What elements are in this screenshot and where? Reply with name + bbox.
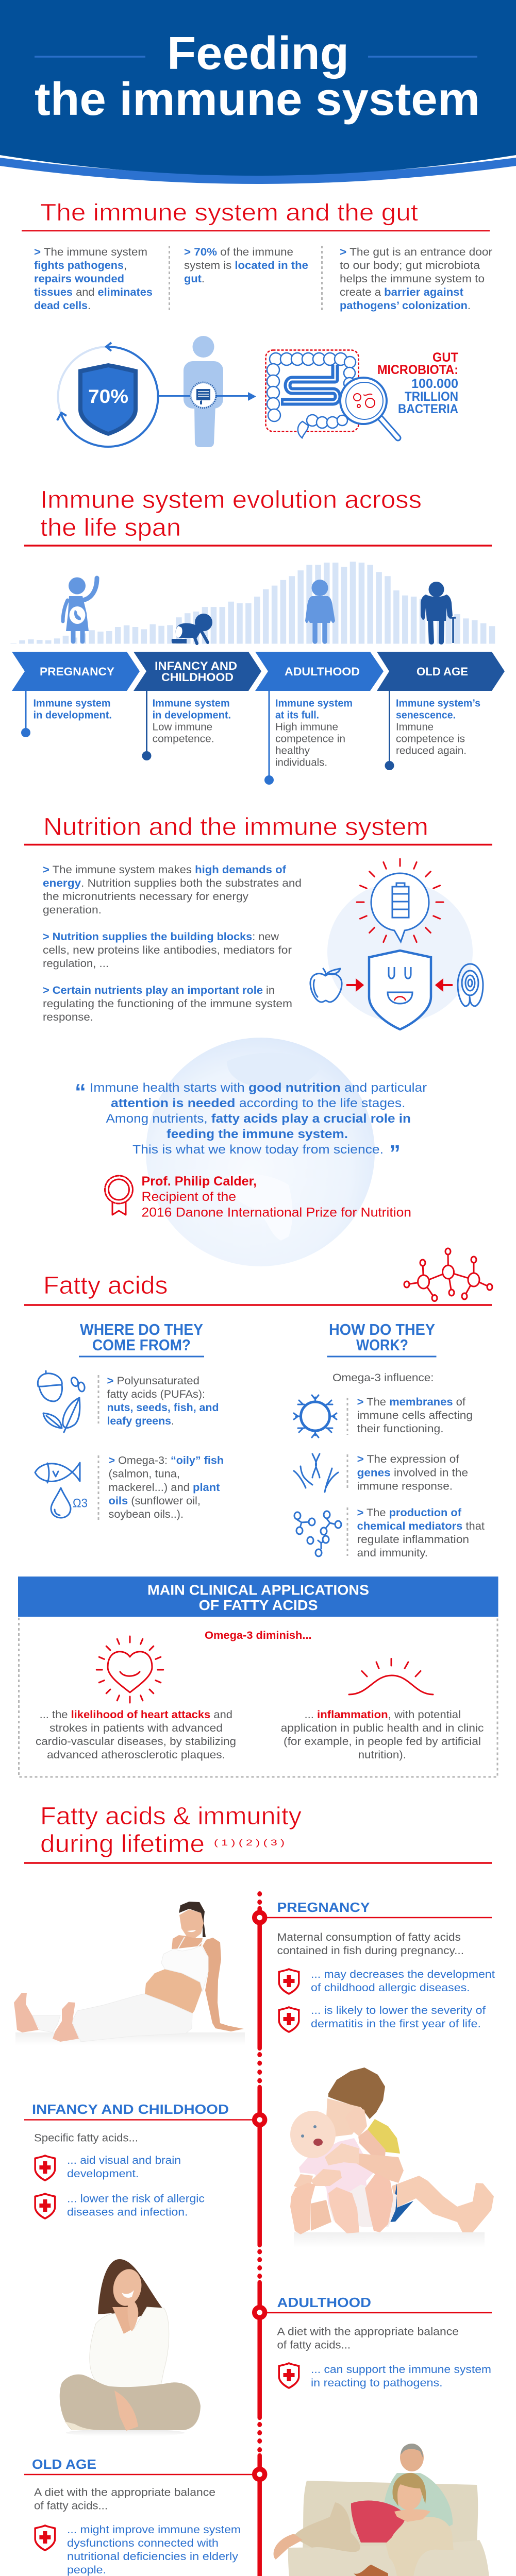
stage note: old age: reduced again.: [396, 745, 467, 756]
column 2: > 70% of the immune: [184, 246, 293, 258]
benefit: allergy risk: diseases and infection.: [67, 2206, 188, 2218]
text: heart benefit: advanced atherosclerotic plaques.: [47, 1749, 225, 1761]
text: PUFAs: fatty acids (PUFAs):: [107, 1388, 205, 1400]
section heading: fatty acids: Fatty acids: [43, 1272, 168, 1299]
text block: nutrition points: > Nutrition supplies the building blocks : new: [43, 931, 279, 943]
benefit: brain development: development.: [67, 2168, 139, 2180]
quote: This is what we know today from science.: [132, 1143, 384, 1157]
chevron: old age: [377, 652, 505, 691]
text: omega-3 sources: [108, 1455, 224, 1520]
text: chemical mediators: > The production of: [357, 1507, 462, 1519]
stage note: old age: Immune: [396, 721, 434, 733]
upper arm: [358, 2129, 386, 2156]
panel: infancy and childhood: [24, 2067, 494, 2248]
speech bubble with battery: [357, 859, 443, 942]
icon: gut with magnifier: [266, 350, 398, 438]
stage note: old age: Immune system’s: [396, 698, 480, 709]
section heading: nutrition and the immune system: Nutrition and the immune system: [43, 814, 428, 841]
text block: nutrition points: > Certain nutrients play an important role in: [43, 985, 275, 996]
text: inflammation benefit: [281, 1709, 484, 1761]
stage note: pregnancy: [21, 691, 112, 737]
text block: nutrition points: regulation, ...: [43, 958, 109, 970]
smiling shield: [369, 951, 431, 1029]
stage note: infancy: Immune system: [153, 698, 230, 709]
subsection heading: PREGNANCY: [277, 1900, 370, 1915]
older child's face and hair: [326, 2098, 364, 2137]
chevron: pregnancy: PREGNANCY: [40, 665, 114, 678]
icon: award rosette: [105, 1176, 133, 1215]
panel: where do they come from: [35, 1320, 224, 1520]
column 3: [340, 246, 492, 312]
photo: pregnant woman: [14, 1902, 245, 2045]
icon: cell membrane: [294, 1395, 337, 1437]
benefit: reacting to pathogens: in reacting to pathogens.: [311, 2377, 443, 2389]
intro: contained in fish during pregnancy...: [277, 1945, 464, 1957]
text block: nutrition points: [43, 864, 302, 1023]
column 3: pathogens’ colonization .: [340, 300, 471, 312]
stage note: adulthood: competence in: [275, 734, 345, 745]
text: inflammation benefit: ... inflammation , with potential: [304, 1709, 461, 1721]
text block: nutrition points: energy. Nutrition supplies both the substrates and: [43, 877, 302, 889]
text: gene expression: genes involved in the: [357, 1467, 468, 1479]
icon: crawling baby: [172, 614, 212, 643]
intro: Maternal consumption of fatty acids: [277, 1931, 461, 1943]
benefit: brain development: ... aid visual and brain: [67, 2155, 181, 2166]
stage note: adulthood: Immune system: [275, 698, 353, 709]
title: Feeding: [167, 28, 349, 79]
benefit: dermatitis: dermatitis in the first year of life.: [311, 2018, 481, 2030]
stage note: adulthood: at its full.: [275, 710, 319, 721]
icon: 70 percent shield in circular arrow: 70%: [88, 386, 128, 407]
column 3: create a barrier against: [340, 286, 463, 298]
stage note: adulthood: healthy: [275, 745, 310, 756]
text: heart benefit: cardio-vascular diseases, by stabilizing: [36, 1736, 236, 1748]
text: membranes: [357, 1396, 473, 1435]
stage note: infancy: Low immune: [153, 721, 212, 733]
panel: how do they work: [294, 1320, 485, 1559]
text block: nutrition points: generation.: [43, 904, 102, 916]
icon: human body with gut highlight: [158, 336, 256, 447]
text: gene expression: > The expression of: [357, 1453, 459, 1465]
text: membranes: > The membranes of: [357, 1396, 465, 1408]
icon: energy shield with food: [310, 859, 483, 1029]
text: PUFAs: [107, 1375, 219, 1427]
ponytail and hair: [179, 1902, 206, 1937]
chevron: pregnancy: [12, 652, 140, 691]
attribution: [141, 1174, 411, 1220]
title: the immune system: [35, 74, 480, 125]
gut microbiota callout: TRILLION: [405, 389, 458, 404]
text: membranes: their functioning.: [357, 1423, 444, 1435]
text: omega-3 sources: > Omega-3: “oily” fish: [108, 1455, 224, 1466]
panel title: [147, 1582, 369, 1613]
section heading: fatty acids and immunity during lifetime: [24, 1803, 492, 1863]
text: PUFAs: nuts, seeds, fish, and: [107, 1402, 219, 1414]
apple: [310, 969, 342, 1002]
text: gene expression: [357, 1453, 468, 1493]
intro: [34, 2487, 215, 2512]
section heading: immune system evolution: [24, 486, 492, 546]
baby body: [299, 2138, 397, 2227]
text block: nutrition points: regulating the functioning of the immune system: [43, 998, 292, 1010]
text: gene expression: immune response.: [357, 1481, 453, 1493]
older child's long leg: [392, 2176, 494, 2232]
benefit: reacting to pathogens: [278, 2362, 491, 2389]
gut microbiota callout: 100.000: [411, 377, 458, 391]
chevron: adulthood: ADULTHOOD: [285, 665, 360, 678]
column 2: gut.: [184, 273, 205, 285]
column 2: [184, 246, 308, 285]
column 1: [34, 246, 153, 312]
subheading: [79, 1320, 204, 1357]
subheading: [327, 1320, 436, 1357]
stage note: pregnancy: Immune system: [33, 698, 110, 709]
column 1: tissues and eliminates: [34, 286, 153, 298]
column 1: dead cells.: [34, 300, 91, 312]
subheading: COME FROM?: [92, 1336, 191, 1354]
text: inflammation benefit: nutrition).: [358, 1749, 406, 1761]
timeline chevrons: [12, 652, 505, 691]
text: heart benefit: ... the likelihood of heart attacks and: [40, 1709, 232, 1721]
column 1: > The immune system: [34, 246, 147, 258]
benefit: nutritional deficiencies: [34, 2524, 241, 2576]
panel title: OF FATTY ACIDS: [199, 1597, 318, 1613]
column 3: to our body; gut microbiota: [340, 260, 480, 272]
text: chemical mediators: chemical mediators that: [357, 1520, 485, 1532]
panel: pregnancy: [14, 1900, 495, 2045]
icon: elderly figure with cane: [421, 582, 456, 643]
section heading: immune system evolution: Immune system evolution across: [40, 486, 422, 514]
section heading: fatty acids and immunity during lifetime: during lifetime: [40, 1831, 205, 1858]
column 2: system is located in the: [184, 260, 308, 272]
icon: nuts seeds and leaves: [38, 1371, 85, 1432]
icon: chemical mediators: [294, 1511, 341, 1556]
text: PUFAs: leafy greens.: [107, 1415, 174, 1427]
stage note: infancy: in development.: [153, 710, 231, 721]
chevron: adulthood: [255, 652, 384, 691]
stage note: pregnancy: in development.: [33, 710, 112, 721]
benefit: dermatitis: [278, 2005, 486, 2033]
benefit: nutritional deficiencies: dysfunctions connected with: [67, 2537, 219, 2549]
icon: inflammation curve: [349, 1659, 433, 1694]
chevron: infancy and childhood: [134, 652, 261, 691]
text: omega-3 sources: (salmon, tuna,: [108, 1468, 180, 1480]
quote: “: [75, 1079, 86, 1105]
quote: attention is needed according to the life stages.: [111, 1096, 405, 1110]
text: omega-3 sources: soybean oils..).: [108, 1509, 184, 1520]
benefit: allergic diseases: ... may decreases the development: [311, 1969, 495, 1980]
globe background: [146, 1038, 375, 1266]
baby head: [290, 2111, 336, 2158]
photo: thoughtful woman: [60, 2259, 201, 2436]
subheading: HOW DO THEY: [329, 1320, 435, 1338]
icon: pregnant woman: [63, 577, 97, 641]
section heading: the immune system and the gut: The immune system and the gut: [40, 199, 418, 226]
intro: of fatty acids...: [34, 2500, 108, 2512]
icon: fatty acid molecule: [404, 1248, 492, 1301]
text: membranes: immune cells affecting: [357, 1410, 473, 1421]
panel title: MAIN CLINICAL APPLICATIONS: [147, 1582, 369, 1598]
arm around baby: [357, 2154, 404, 2183]
quote: ”: [389, 1141, 401, 1166]
stage note: infancy: competence.: [153, 734, 214, 745]
icon: 70 percent shield in circular arrow: [57, 343, 158, 447]
intro: of fatty acids...: [277, 2339, 351, 2351]
arrow into shield: [346, 980, 362, 990]
panel: old age: [24, 2444, 490, 2576]
icon: adult figure: [305, 580, 335, 641]
quote: [75, 1079, 427, 1166]
gut microbiota callout: GUT: [432, 350, 458, 365]
bar chart: immune competence across life: [13, 562, 492, 644]
text: heart benefit: strokes in patients with advanced: [49, 1722, 223, 1734]
benefit: reacting to pathogens: ... can support the immune system: [311, 2364, 491, 2376]
stage note: old age: senescence.: [396, 710, 456, 721]
subsection heading: ADULTHOOD: [277, 2295, 371, 2310]
section heading: immune system evolution: the life span: [40, 514, 181, 541]
header banner: [0, 0, 516, 184]
hand on head: [345, 2107, 367, 2137]
benefit: nutritional deficiencies: nutritional deficiencies in elderly: [67, 2551, 239, 2563]
icon: happy heart: [96, 1636, 163, 1703]
salmon steak: [458, 964, 483, 1006]
photo: older couple on sofa: [274, 2444, 490, 2576]
text: chemical mediators: regulate inflammation: [357, 1534, 469, 1546]
lead-in: Omega-3 diminish...: [205, 1630, 312, 1641]
stage note: old age: [385, 691, 480, 770]
chevron: old age: OLD AGE: [417, 665, 468, 678]
attribution: 2016 Danone International Prize for Nutrition: [141, 1206, 411, 1220]
benefit: allergic diseases: of childhood allergic diseases.: [311, 1982, 470, 1994]
benefit: dermatitis: ... is likely to lower the severity of: [311, 2005, 486, 2016]
shirt: [368, 2119, 400, 2154]
subsection heading: OLD AGE: [32, 2456, 96, 2472]
gut microbiota callout: MICROBIOTA:: [377, 363, 458, 377]
text: chemical mediators: and immunity.: [357, 1547, 428, 1559]
intro: Specific fatty acids...: [34, 2132, 138, 2144]
benefit: allergy risk: ... lower the risk of allergic: [67, 2193, 205, 2205]
gut microbiota callout: BACTERIA: [398, 402, 458, 416]
stage note: old age: competence is: [396, 734, 465, 745]
text columns: immune system facts: [34, 246, 492, 312]
quote: Immune health starts with good nutrition and particular: [90, 1081, 427, 1095]
benefit: allergic diseases: [278, 1968, 495, 1995]
photo: children: [290, 2067, 494, 2248]
text: omega-3 sources: mackerel...) and plant: [108, 1482, 220, 1494]
text: heart benefit: [36, 1709, 236, 1761]
column 1: repairs wounded: [34, 273, 124, 285]
chevron: infancy and childhood: INFANCY AND: [155, 659, 237, 672]
subsection heading: INFANCY AND CHILDHOOD: [32, 2102, 229, 2117]
quote: Among nutrients, fatty acids play a crucial role in: [106, 1112, 411, 1126]
stage note: infancy: [142, 691, 231, 760]
column 1: fights pathogens,: [34, 260, 127, 272]
text block: nutrition points: the micronutrients necessary for energy: [43, 891, 249, 903]
intro: [277, 1931, 464, 1957]
benefit: allergy risk: [34, 2193, 205, 2219]
stage note: adulthood: High immune: [275, 721, 338, 733]
chevron: infancy and childhood: CHILDHOOD: [161, 671, 234, 684]
panel: adulthood: [60, 2259, 492, 2436]
text: inflammation benefit: (for example, in people fed by artificial: [284, 1736, 481, 1748]
text: PUFAs: > Polyunsaturated: [107, 1375, 199, 1387]
text: chemical mediators: [357, 1507, 485, 1559]
text: omega-3 sources: oils (sunflower oil,: [108, 1495, 201, 1507]
left arm and legs: [294, 2174, 313, 2192]
arrow into shield from salmon: [437, 980, 453, 990]
stage note: adulthood: individuals.: [275, 757, 327, 769]
stage note: adulthood: [264, 691, 353, 785]
intro: A diet with the appropriate balance: [277, 2326, 459, 2338]
benefit: nutritional deficiencies: ... might improve immune system: [67, 2524, 241, 2536]
subheading: WHERE DO THEY: [80, 1320, 203, 1338]
column 3: > The gut is an entrance door: [340, 246, 492, 258]
icon: fish and omega-3 drop: Ω3: [73, 1496, 88, 1511]
section heading: fatty acids and immunity during lifetime: ( 1 ) ( 2 ) ( 3 ): [214, 1838, 285, 1848]
intro: A diet with the appropriate balance: [34, 2487, 215, 2499]
timeline arrow: [246, 1891, 273, 2576]
attribution: Prof. Philip Calder,: [141, 1174, 257, 1189]
intro: Omega-3 influence:: [332, 1372, 434, 1384]
text: inflammation benefit: application in public health and in clinic: [281, 1722, 484, 1734]
subheading: WORK?: [356, 1336, 408, 1354]
column 3: helps the immune system to: [340, 273, 485, 285]
section heading: fatty acids and immunity during lifetime: Fatty acids & immunity: [40, 1803, 302, 1830]
icon: chromosomes: [294, 1454, 338, 1492]
icon: fish and omega-3 drop: [35, 1463, 88, 1518]
intro: [277, 2326, 459, 2351]
quote: feeding the immune system.: [167, 1127, 348, 1141]
panel: main clinical applications: [18, 1577, 498, 1777]
gut microbiota callout: [377, 350, 458, 416]
benefit: brain development: [34, 2155, 181, 2181]
title: [35, 28, 480, 125]
text block: nutrition points: > The immune system makes high demands of: [43, 864, 287, 876]
text block: nutrition points: cells, new proteins like antibodies, mediators for: [43, 944, 292, 956]
attribution: Recipient of the: [141, 1190, 236, 1204]
text block: nutrition points: response.: [43, 1011, 93, 1023]
benefit: nutritional deficiencies: people.: [67, 2564, 106, 2576]
